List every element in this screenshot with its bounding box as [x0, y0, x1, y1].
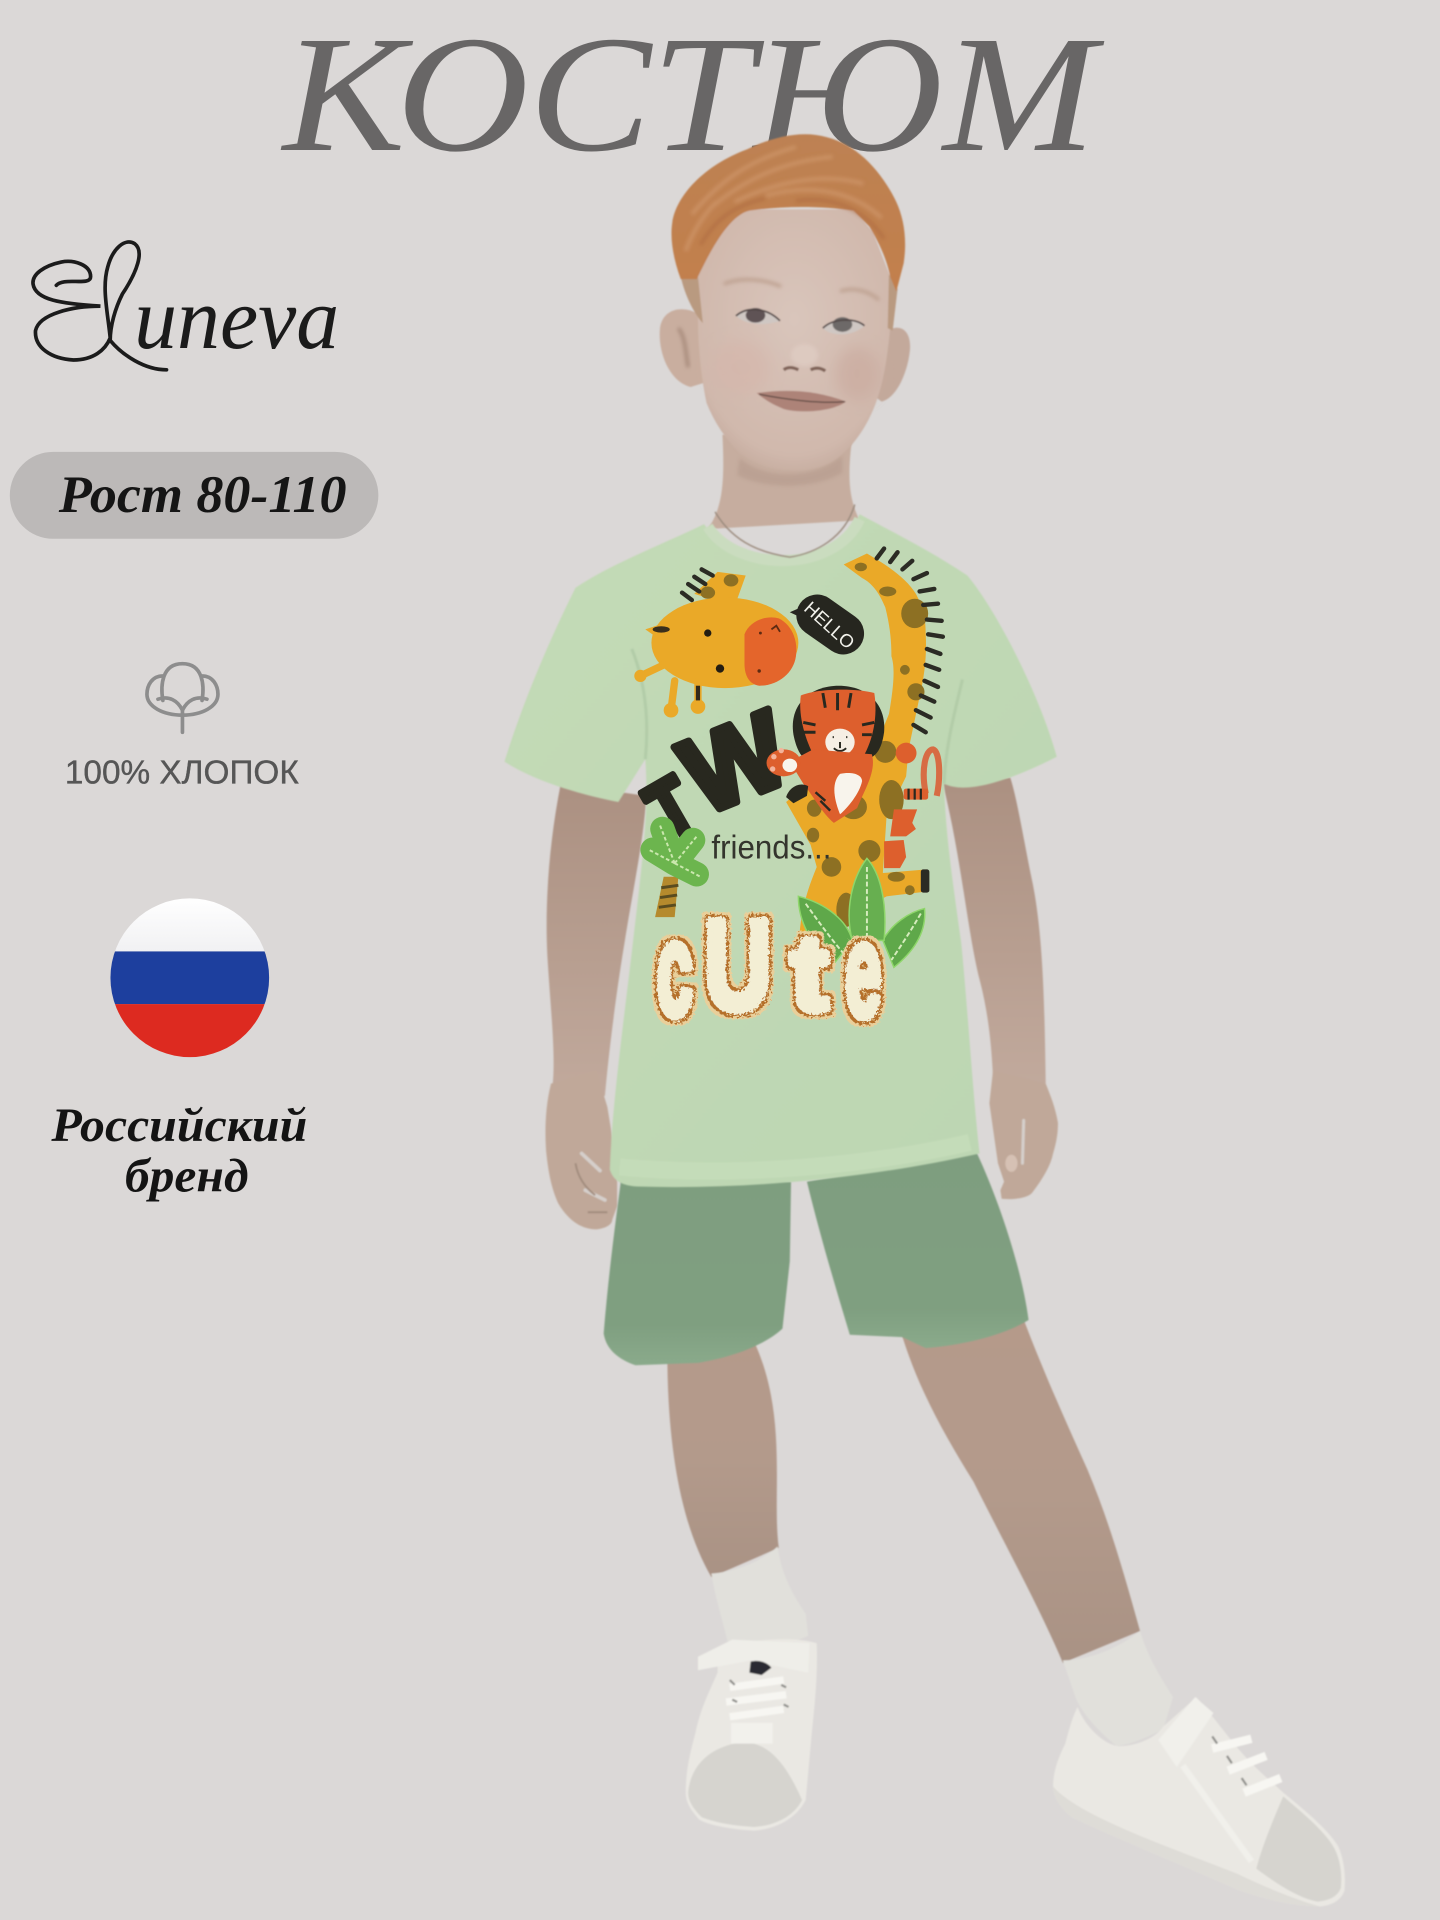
tiger paw	[767, 749, 801, 776]
face	[697, 209, 892, 471]
giraffe horn tip	[786, 785, 808, 803]
left short leg	[604, 1163, 791, 1365]
arms	[545, 778, 1058, 1229]
cute patch lettering: U	[704, 894, 771, 1036]
left shoe	[686, 1639, 817, 1831]
two lettering: W	[665, 687, 805, 837]
giraffe spots	[807, 563, 928, 927]
hair	[671, 134, 905, 291]
right arm	[943, 778, 1046, 1084]
right short leg	[807, 1151, 1029, 1348]
shirt hem	[620, 1142, 970, 1171]
right hand	[989, 1070, 1058, 1199]
cute patch lettering: c	[656, 896, 693, 1044]
right shoe	[1053, 1697, 1345, 1907]
tiger	[767, 686, 939, 868]
tiger head	[800, 690, 876, 760]
left toe cap	[688, 1742, 802, 1827]
icon: russian flag	[110, 898, 269, 1058]
height pill: Рост 80-110	[58, 466, 347, 524]
shirt print	[631, 549, 943, 1045]
giraffe body	[786, 549, 943, 933]
right sole	[1053, 1787, 1320, 1907]
right eye	[823, 317, 864, 334]
left hand	[545, 1070, 617, 1229]
right sock	[1063, 1631, 1173, 1746]
necklace	[715, 504, 855, 557]
nose	[784, 344, 825, 371]
letter o backing	[793, 686, 884, 759]
cotton label: 100% ХЛОПОК	[65, 755, 300, 792]
right toe cap	[1256, 1796, 1341, 1902]
left leg	[667, 1332, 779, 1577]
legs and shoes	[667, 1316, 1345, 1907]
two lettering: T	[631, 759, 712, 859]
t-shirt	[504, 504, 1057, 1187]
cheeks	[711, 340, 770, 394]
collar	[708, 519, 860, 561]
left strap	[698, 1640, 809, 1673]
left sock	[711, 1547, 808, 1646]
russian brand label: Российский	[50, 1099, 307, 1152]
right leg	[900, 1316, 1140, 1663]
russian brand label: бренд	[125, 1149, 249, 1202]
palm tree	[649, 825, 700, 917]
brand logo	[33, 242, 339, 370]
brand logo: Luneva	[132, 270, 339, 368]
friends text: friends...	[711, 829, 831, 866]
title: КОСТЮМ	[281, 3, 1105, 187]
tiger hand and tail	[896, 743, 917, 763]
giraffe head	[634, 569, 798, 718]
tiger body	[790, 749, 873, 823]
boy figure	[504, 134, 1345, 1907]
left ear	[660, 309, 707, 387]
giraffe mane	[877, 549, 943, 732]
hello speech bubble	[788, 586, 872, 663]
cute patch lettering: t	[791, 915, 828, 1032]
left eye	[736, 308, 780, 324]
hair streaks	[686, 147, 882, 251]
tiger legs	[904, 789, 928, 800]
giraffe hoof	[921, 869, 929, 893]
mouth	[757, 391, 846, 411]
sideburns	[681, 277, 703, 323]
shorts	[604, 1151, 1029, 1365]
icon: cotton boll	[147, 664, 218, 732]
russian brand label	[50, 1099, 307, 1202]
giraffe muzzle	[744, 617, 796, 686]
eyebrows	[724, 280, 879, 300]
left arm	[547, 784, 647, 1096]
jungle leaves	[798, 858, 925, 967]
neck	[708, 429, 860, 529]
right strap	[1158, 1697, 1213, 1767]
shirt print: e	[845, 897, 882, 1045]
cute patch lettering	[656, 894, 882, 1045]
right ear	[872, 328, 910, 402]
height pill	[10, 452, 378, 539]
head	[660, 134, 910, 471]
hello speech bubble: HELLO	[800, 597, 859, 653]
